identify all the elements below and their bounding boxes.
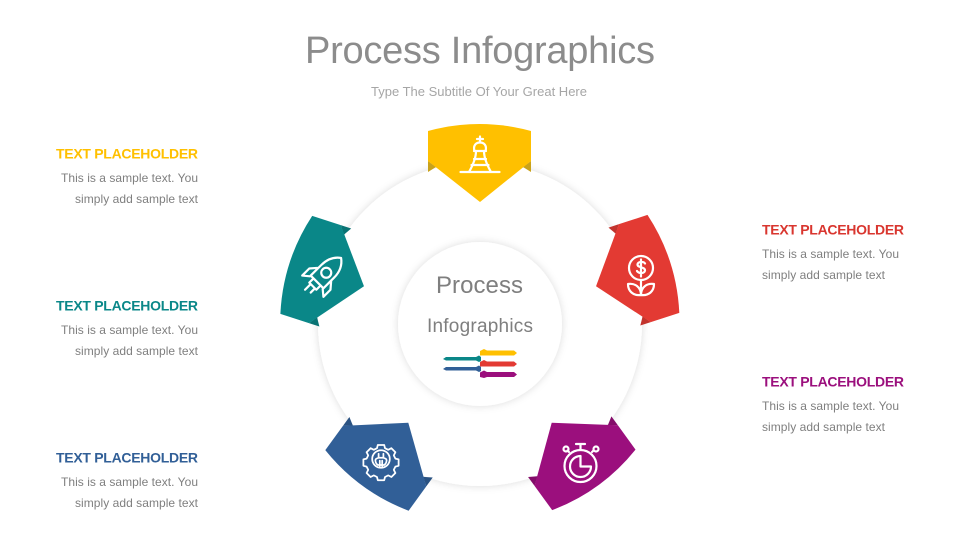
- title: Process Infographics: [305, 30, 655, 72]
- text block: teal: [56, 298, 199, 358]
- icon: money flower: [628, 256, 654, 295]
- outer ring: [318, 162, 642, 486]
- text block: purple: This is a sample text. You: [762, 399, 899, 413]
- panel: blue segment: [321, 393, 450, 516]
- text block: purple: simply add sample text: [762, 420, 886, 434]
- text block: red: simply add sample text: [762, 268, 886, 282]
- icon: stopwatch: [564, 444, 598, 482]
- text block: yellow: TEXT PLACEHOLDER: [56, 146, 198, 162]
- text block: purple: TEXT PLACEHOLDER: [762, 374, 904, 390]
- text block: yellow: simply add sample text: [75, 192, 199, 206]
- icon: gear wrench: [363, 445, 399, 480]
- text block: blue: [56, 450, 199, 510]
- center circle: [398, 242, 562, 406]
- text block: red: [762, 222, 904, 282]
- subtitle: Type The Subtitle Of Your Great Here: [371, 84, 587, 99]
- icon: rocket: [297, 247, 352, 302]
- panel: yellow segment: [428, 124, 531, 202]
- text block: teal: simply add sample text: [75, 344, 199, 358]
- center subheading: Infographics: [427, 316, 533, 337]
- center heading: Process: [436, 272, 523, 299]
- text block: yellow: [56, 146, 199, 206]
- text block: red: TEXT PLACEHOLDER: [762, 222, 904, 238]
- panel: teal segment: [274, 214, 380, 336]
- panel: red segment: [580, 213, 686, 335]
- center ribbons icon: [443, 349, 517, 378]
- panel: purple segment: [510, 392, 640, 516]
- text block: blue: simply add sample text: [75, 496, 199, 510]
- text block: teal: This is a sample text. You: [61, 323, 198, 337]
- text block: purple: [762, 374, 904, 434]
- icon: chess king: [460, 136, 500, 172]
- text block: yellow: This is a sample text. You: [61, 171, 198, 185]
- text block: blue: This is a sample text. You: [61, 475, 198, 489]
- text block: teal: TEXT PLACEHOLDER: [56, 298, 198, 314]
- text block: red: This is a sample text. You: [762, 247, 899, 261]
- text block: blue: TEXT PLACEHOLDER: [56, 450, 198, 466]
